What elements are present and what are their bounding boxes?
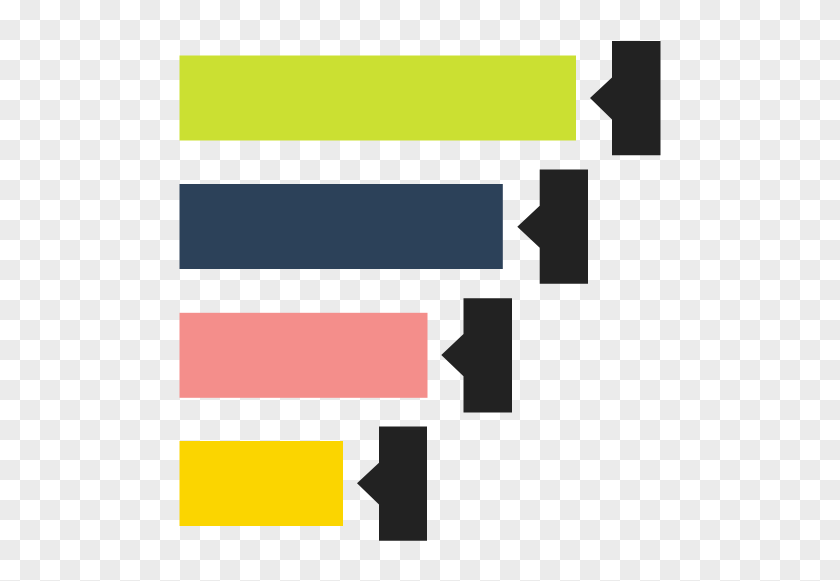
callout 3: dark tag pointing to pink bar	[441, 298, 512, 412]
callout 1: dark tag pointing to lime bar	[590, 41, 660, 155]
bar 4: yellow	[180, 441, 343, 526]
callout 4: dark tag pointing to yellow bar	[357, 426, 427, 541]
callout 2: dark tag pointing to navy bar	[517, 170, 588, 284]
bar 2: navy	[180, 184, 503, 269]
bar 1: lime	[180, 56, 576, 140]
bar 3: pink	[180, 313, 428, 398]
